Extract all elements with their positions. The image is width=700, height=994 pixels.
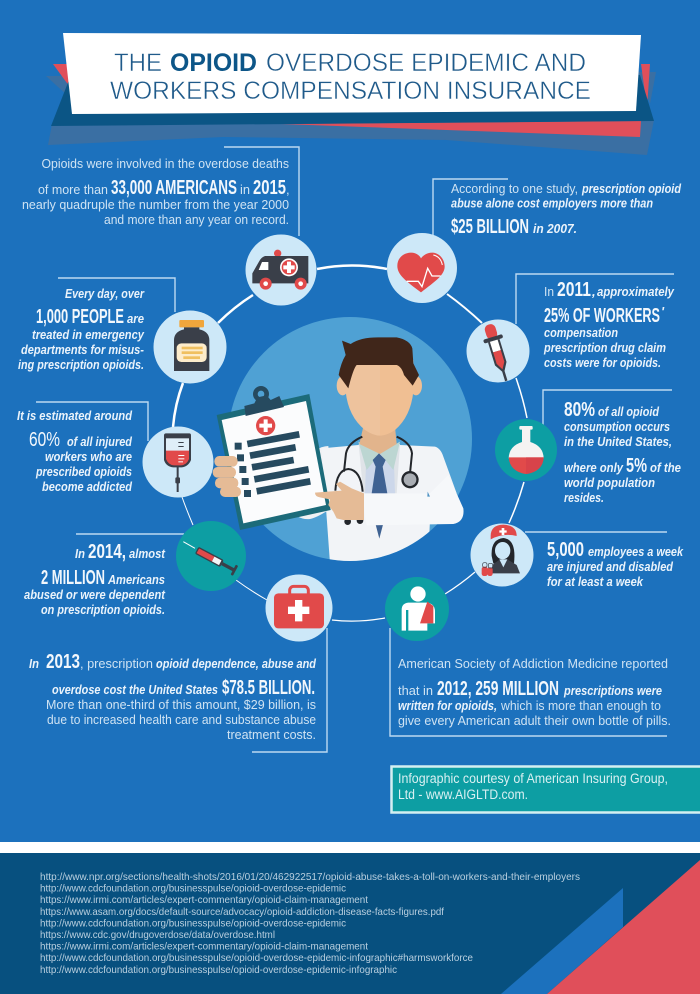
text bbox=[547, 539, 684, 589]
text: 5,000 bbox=[547, 539, 584, 561]
text: resides. bbox=[564, 490, 604, 505]
text: More than one-third of this amount, $29 billion, is bbox=[46, 697, 316, 712]
text: overdose cost the United States bbox=[52, 682, 218, 697]
connector bbox=[433, 179, 508, 236]
text: $78.5 BILLION. bbox=[222, 677, 315, 699]
timeline ring bbox=[173, 266, 527, 621]
block: heart bbox=[387, 179, 682, 303]
tie bbox=[372, 453, 387, 493]
text: for at least a week bbox=[547, 574, 644, 589]
text bbox=[543, 279, 675, 370]
block: arm sling bbox=[385, 577, 671, 736]
text: prescriptions were bbox=[563, 683, 662, 698]
block: IV bag bbox=[17, 402, 214, 498]
neck bbox=[359, 427, 397, 454]
text: and more than any year on record. bbox=[104, 212, 289, 227]
connector bbox=[390, 628, 667, 736]
text: , prescription bbox=[80, 656, 153, 671]
block: dropper bbox=[466, 274, 675, 384]
text: of more than bbox=[38, 182, 108, 197]
text: According to one study, bbox=[451, 181, 578, 196]
text: , bbox=[591, 284, 596, 299]
text bbox=[18, 286, 145, 372]
title text: THE bbox=[114, 49, 162, 77]
text: ' bbox=[661, 304, 665, 319]
text: prescription drug claim bbox=[543, 340, 666, 355]
text: written for opioids, bbox=[398, 698, 497, 713]
connector bbox=[252, 628, 327, 752]
text: in the United States, bbox=[564, 434, 672, 449]
source links: http://www.cdcfoundation.org/businesspulse/opioid-overdose-epidemic-infographic#harmsworkforce bbox=[40, 953, 473, 964]
text: 2012, 259 MILLION bbox=[437, 678, 559, 700]
icon: nurse bbox=[470, 524, 534, 586]
source links: http://www.cdcfoundation.org/businesspulse/opioid-overdose-epidemic-infographic bbox=[40, 965, 397, 976]
blue triangle bbox=[501, 888, 623, 994]
text: 2 MILLION bbox=[41, 567, 105, 589]
text: world population bbox=[564, 475, 655, 490]
icon: flask bbox=[495, 419, 557, 481]
text: costs were for opioids. bbox=[544, 355, 661, 370]
text: 5% bbox=[626, 455, 647, 477]
clipboard bbox=[217, 388, 331, 530]
footer band bbox=[0, 842, 700, 994]
ears bbox=[337, 376, 349, 395]
text: 2013 bbox=[46, 651, 80, 673]
text: are bbox=[127, 311, 144, 326]
text bbox=[564, 399, 681, 505]
connector bbox=[224, 147, 299, 236]
text: In bbox=[544, 284, 554, 299]
clipboard hand fingers bbox=[213, 456, 241, 497]
pointing hand bbox=[315, 482, 364, 520]
source links: http://www.cdcfoundation.org/businesspulse/opioid-overdose-epidemic bbox=[40, 918, 346, 929]
title text: WORKERS COMPENSATION INSURANCE bbox=[110, 77, 591, 105]
block: pill bottle bbox=[18, 278, 226, 384]
text: ing prescription opioids. bbox=[18, 357, 144, 372]
text: in 2007. bbox=[533, 221, 577, 236]
connector bbox=[58, 278, 175, 312]
text: where only bbox=[564, 460, 624, 475]
text: of all injured bbox=[67, 434, 133, 449]
text: become addicted bbox=[42, 479, 133, 494]
text: due to increased health care and substance abuse bbox=[47, 712, 316, 727]
icon: IV bag bbox=[142, 426, 214, 498]
text: $25 BILLION bbox=[451, 216, 529, 238]
text: 80% bbox=[564, 399, 595, 421]
connector bbox=[543, 390, 672, 426]
icon: dropper bbox=[466, 320, 530, 384]
source links: https://www.irmi.com/articles/expert-commentary/opioid-claim-management bbox=[40, 895, 368, 906]
left arm behind clipboard bbox=[293, 446, 333, 519]
connector bbox=[76, 533, 184, 535]
text bbox=[17, 408, 133, 494]
text: workers who are bbox=[45, 449, 132, 464]
courtesy box bbox=[392, 766, 700, 812]
title text bbox=[110, 49, 591, 105]
source links: http://www.cdcfoundation.org/businesspulse/opioid-overdose-epidemic bbox=[40, 884, 346, 895]
hair bbox=[339, 337, 419, 388]
text: 1,000 PEOPLE bbox=[36, 306, 124, 328]
source links bbox=[40, 872, 580, 976]
central doctor circle bbox=[228, 317, 472, 561]
text bbox=[22, 156, 290, 227]
text: that in bbox=[398, 683, 433, 698]
text: give every American adult their own bottle of pills. bbox=[398, 713, 671, 728]
connector bbox=[516, 274, 674, 324]
text: American Society of Addiction Medicine reported bbox=[398, 656, 668, 671]
plus bbox=[256, 416, 275, 435]
text: almost bbox=[129, 546, 166, 561]
text: 2014, bbox=[88, 541, 126, 563]
clip bbox=[255, 388, 267, 400]
text: Americans bbox=[107, 572, 165, 587]
title text: OPIOID bbox=[170, 49, 257, 77]
stethoscope bbox=[344, 437, 362, 472]
text: in bbox=[240, 182, 250, 197]
text: prescription opioid bbox=[581, 181, 682, 196]
text: treated in emergency bbox=[32, 327, 145, 342]
text: consumption occurs bbox=[564, 419, 670, 434]
text: 60% bbox=[29, 429, 60, 451]
icon: heart bbox=[387, 233, 457, 303]
block: nurse bbox=[470, 524, 684, 589]
text: It is estimated around bbox=[17, 408, 133, 423]
coat bbox=[322, 445, 457, 563]
text: Every day, over bbox=[65, 286, 145, 301]
text: nearly quadruple the number from the year 2000 bbox=[22, 197, 289, 212]
text: opioid dependence, abuse and bbox=[156, 656, 317, 671]
text: abuse alone cost employers more than bbox=[451, 196, 653, 210]
text: approximately bbox=[597, 284, 675, 299]
connector bbox=[36, 402, 148, 441]
text: departments for misus- bbox=[21, 342, 144, 357]
sleeve bbox=[364, 475, 464, 525]
text: on prescription opioids. bbox=[41, 602, 165, 617]
text: Opioids were involved in the overdose deaths bbox=[42, 156, 289, 171]
lines bbox=[247, 434, 310, 491]
text: prescribed opioids bbox=[35, 464, 132, 479]
text: In bbox=[29, 656, 39, 671]
connector bbox=[525, 531, 667, 533]
face bbox=[346, 353, 380, 436]
text bbox=[451, 181, 682, 238]
text: , bbox=[286, 182, 290, 197]
text: of the bbox=[650, 460, 681, 475]
icon: arm sling bbox=[385, 577, 449, 641]
icon: ambulance bbox=[246, 234, 316, 306]
block: syringe bbox=[24, 521, 246, 617]
text: abused or were dependent bbox=[24, 587, 166, 602]
text bbox=[24, 541, 166, 617]
icon: pill bottle bbox=[154, 310, 226, 384]
title banner bbox=[46, 33, 656, 155]
block: ambulance bbox=[22, 147, 316, 306]
source links: https://www.asam.org/docs/default-source/advocacy/opioid-addiction-disease-facts-figures.pdf bbox=[40, 907, 444, 918]
text: are injured and disabled bbox=[547, 559, 674, 574]
text: 33,000 AMERICANS bbox=[111, 177, 237, 199]
text: 2015 bbox=[253, 177, 286, 199]
text: In bbox=[75, 546, 85, 561]
courtesy box: Infographic courtesy of American Insuring Group, bbox=[398, 771, 668, 786]
icon: first aid kit bbox=[266, 574, 332, 642]
icon: syringe bbox=[176, 521, 246, 591]
source links: http://www.npr.org/sections/health-shots/2016/01/20/462922517/opioid-abuse-takes-a-toll-on-workers-and-their-employers bbox=[40, 872, 580, 883]
text: of all opioid bbox=[598, 404, 660, 419]
red triangle bbox=[547, 860, 700, 994]
title text: OVERDOSE EPIDEMIC AND bbox=[266, 49, 586, 77]
text: 2011 bbox=[557, 279, 591, 301]
courtesy box: Ltd - www.AIGLTD.com. bbox=[398, 787, 528, 802]
text: employees a week bbox=[588, 544, 684, 559]
block: first aid bbox=[29, 574, 332, 752]
text bbox=[29, 651, 317, 742]
text: treatment costs. bbox=[227, 727, 316, 742]
text bbox=[398, 656, 671, 728]
source links: https://www.cdc.gov/drugoverdose/data/overdose.html bbox=[40, 930, 275, 941]
doctor illustration bbox=[213, 337, 464, 563]
block: flask bbox=[495, 390, 681, 505]
text: compensation bbox=[544, 325, 618, 340]
text: which is more than enough to bbox=[500, 698, 661, 713]
source links: https://www.irmi.com/articles/expert-commentary/opioid-claim-management bbox=[40, 942, 368, 953]
